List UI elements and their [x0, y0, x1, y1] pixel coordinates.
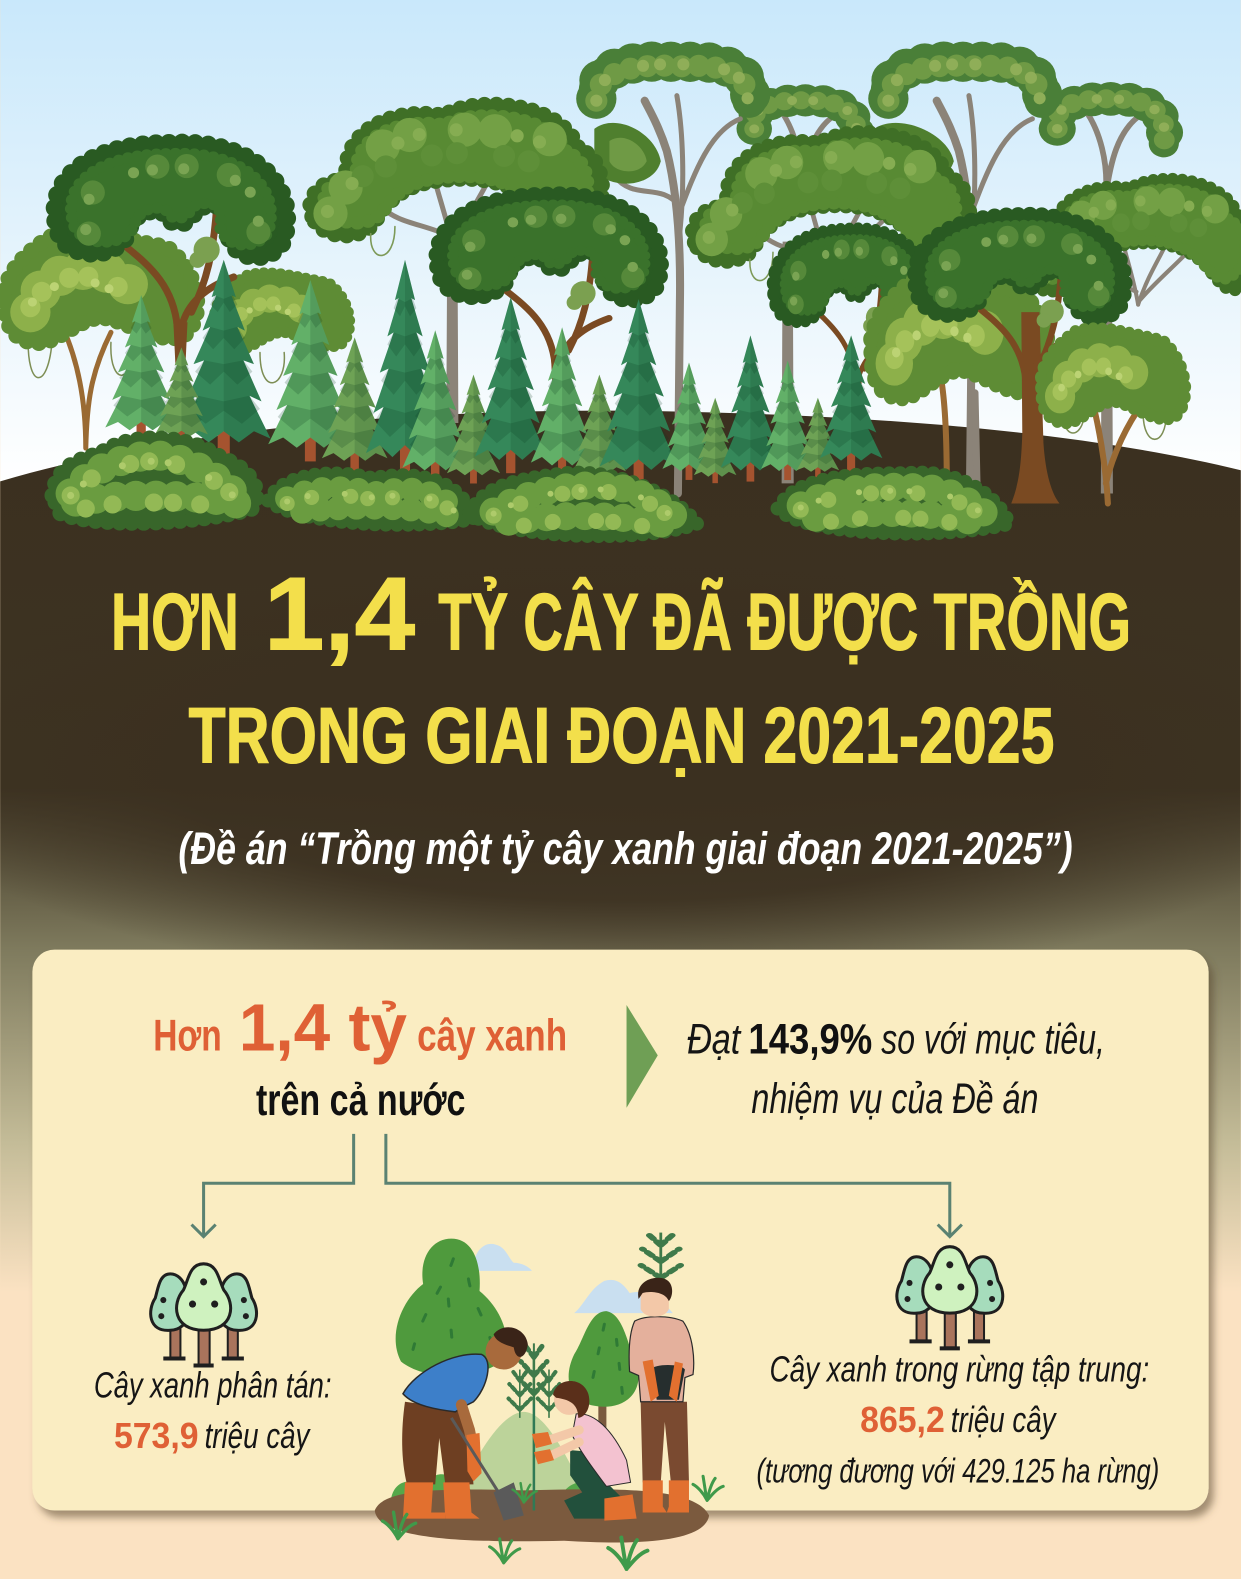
shrubs — [53, 439, 1009, 536]
target achievement text: nhiệm vụ của Đề án — [751, 1075, 1038, 1122]
arrow: green triangle — [627, 1005, 658, 1108]
concentrated forest text: 865,2 — [860, 1399, 945, 1440]
hill and low shrubs — [391, 1412, 627, 1500]
illustration: people planting trees — [375, 1233, 723, 1569]
child kneeling — [532, 1381, 637, 1521]
total headline: cây xanh — [417, 1011, 567, 1060]
scattered trees text: Cây xanh phân tán: — [94, 1365, 331, 1406]
big tree — [396, 1239, 506, 1390]
grey trunks of mid trees — [446, 232, 1113, 493]
man in blue shirt with shovel — [402, 1327, 528, 1521]
concentrated forest text: triệu cây — [951, 1399, 1057, 1440]
scattered trees text — [94, 1365, 331, 1456]
pine trees — [105, 260, 882, 484]
shrub: centre left — [268, 474, 473, 525]
small tree — [569, 1311, 639, 1430]
target achievement text: so với mục tiêu, — [881, 1015, 1105, 1062]
clouds — [474, 1244, 673, 1313]
icon: scattered trees — [151, 1264, 257, 1366]
grass tufts — [382, 1476, 723, 1569]
man with potted plant — [629, 1233, 694, 1513]
shrub: right — [778, 473, 1009, 534]
panel: summary card — [32, 950, 1209, 1511]
target achievement text: Đạt — [687, 1015, 742, 1062]
soil — [375, 1489, 709, 1542]
light green canopy trees — [5, 233, 350, 448]
sky background — [0, 0, 1241, 483]
tall grey trees at back — [446, 61, 1165, 493]
ground and page gradient background — [0, 411, 1241, 1579]
target achievement text: 143,9% — [748, 1015, 872, 1062]
arrow: to scattered trees — [192, 1134, 354, 1237]
mid-green canopy trees — [310, 105, 1241, 308]
arrow: to concentrated forest — [386, 1134, 962, 1237]
dark green canopy trees — [55, 143, 1185, 504]
title: HƠN — [111, 578, 239, 668]
total headline: Hơn — [153, 1011, 222, 1060]
target achievement text — [687, 1015, 1105, 1122]
scattered trees text: triệu cây — [205, 1415, 311, 1456]
shrub: centre — [469, 473, 697, 536]
total headline: 1,4 tỷ — [239, 991, 407, 1065]
total headline — [153, 991, 567, 1125]
title — [111, 556, 1131, 779]
sapling — [509, 1343, 560, 1511]
shrub: left — [53, 439, 257, 523]
scattered trees text: 573,9 — [114, 1415, 199, 1456]
forest illustration — [5, 61, 1241, 536]
title: 1,4 — [264, 556, 415, 672]
concentrated forest text — [756, 1349, 1159, 1490]
icon: concentrated forest trees — [897, 1247, 1003, 1348]
total headline: trên cả nước — [256, 1076, 465, 1125]
